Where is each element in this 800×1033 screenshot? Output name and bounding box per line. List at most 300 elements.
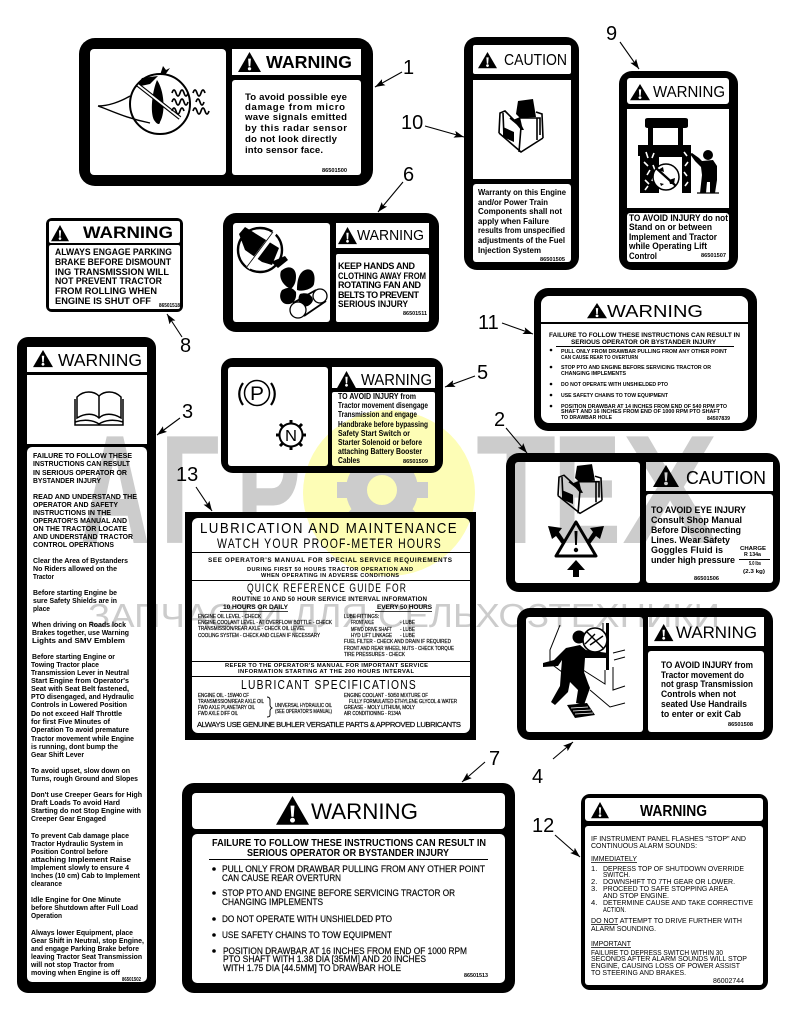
text block: fan: CLOTHING AWAY FROM xyxy=(338,271,426,281)
text block: 200 hour interval xyxy=(225,663,428,675)
text block: eye injury: Consult Shop Manual xyxy=(651,515,742,525)
column: 10 hours or daily xyxy=(198,604,332,639)
text block: operator instructions: INSTRUCTIONS CAN RESULT xyxy=(33,459,130,468)
text block: shutdown procedure: 4. xyxy=(591,898,597,907)
column: every 50 hours: MFWD DRIVE SHAFT xyxy=(351,627,393,633)
decal 12: alarm warning: 86002744 xyxy=(713,978,744,985)
text block: operator instructions: Gear Shift in Neutral, stop Engine, xyxy=(31,936,144,945)
heading: WARNING: WARNING xyxy=(640,803,707,820)
heading: CAUTION: CAUTION xyxy=(504,52,567,69)
callout 7 with arrow xyxy=(462,748,500,782)
decal 7: drawbar warning large xyxy=(182,783,515,993)
text block: instructions: CHANGING IMPLEMENTS xyxy=(222,897,323,908)
icon: hand and fan with belt xyxy=(238,227,327,318)
text block: operator instructions: Tractor xyxy=(33,572,54,581)
callout 2 with arrow xyxy=(494,409,527,453)
callout 5 with arrow: 5 xyxy=(477,362,488,384)
text block: warranty xyxy=(478,187,566,255)
text block: warranty: Injection System xyxy=(478,245,541,255)
text block: operator instructions: will not stop Tractor from xyxy=(30,960,114,969)
text block: operator instructions: READ AND UNDERSTAND THE xyxy=(33,492,137,501)
text block: handrails: seated Use Handrails xyxy=(661,699,747,709)
text block: operator instructions: Tractor movement while Engine xyxy=(31,734,134,743)
column: 10 hours or daily: 10 HOURS OR DAILY xyxy=(223,604,289,611)
text block: operator instructions: leaving Tractor Seat Transmission xyxy=(31,952,142,961)
watermark: АГРТЕХ letters and subtitle: Р xyxy=(236,403,301,576)
text block: shutdown procedure: ALARM SOUNDING. xyxy=(591,924,656,933)
callout 9 with arrow xyxy=(606,23,639,69)
text block: operator instructions: place xyxy=(33,604,50,613)
text block: warranty: adjustments of the Fuel xyxy=(478,235,565,245)
text block: operator instructions: moving when Engine is off xyxy=(31,968,120,977)
text block: operator instructions: Creeper Gear Engaged xyxy=(31,814,106,823)
warning triangle xyxy=(33,350,53,367)
callout 4 with arrow: 4 xyxy=(532,766,543,788)
heading: CAUTION: CAUTION xyxy=(686,468,766,488)
text block: tractor movement: attaching Battery Booster xyxy=(338,447,422,456)
text block: eye damage: into sensor face. xyxy=(245,145,323,156)
text block: tractor movement: TO AVOID INJURY from xyxy=(338,392,416,401)
text block: shutdown procedure: DO NOT ATTEMPT TO DRIVE FURTHER WITH xyxy=(591,916,742,925)
text block: instructions: USE SAFETY CHAINS TO TOW EQUIPMENT xyxy=(561,393,669,399)
text block: eye injury: Lines. Wear Safety xyxy=(651,535,730,545)
text block: operator instructions: Before starting Engine be xyxy=(33,588,117,597)
text block: warranty: Warranty on this Engine xyxy=(478,187,566,197)
text block: operator instructions: Seat with Seat Belt fastened, xyxy=(31,684,129,693)
text block: eye injury: Before Disconnecting xyxy=(651,525,741,535)
text block: instructions: DO NOT OPERATE WITH UNSHIELDED PTO xyxy=(222,914,392,925)
icon: open book xyxy=(75,392,123,425)
text block: instructions: CHANGING IMPLEMENTS xyxy=(561,371,627,377)
heading: WARNING: WARNING xyxy=(58,350,142,370)
text block: tractor movement: Transmission and engage xyxy=(338,410,418,419)
callout 5 with arrow xyxy=(445,362,488,387)
warning triangle xyxy=(587,303,607,318)
text block: lubricant list right xyxy=(344,693,457,717)
column: 10 hours or daily: COOLING SYSTEM - CHECK AND CLEAN IF NECESSARY xyxy=(198,633,320,639)
text block: shutdown procedure: IMMEDIATELY xyxy=(591,854,637,863)
text block: eye injury: under high pressure xyxy=(651,555,735,565)
refrigerant charge note: (2.3 kg) xyxy=(743,569,765,575)
icon: neutral gear: N xyxy=(285,428,297,445)
decal 12: alarm warning xyxy=(581,794,768,990)
callout 2 with arrow: 2 xyxy=(494,409,505,431)
text block: instructions: SERIOUS OPERATOR OR BYSTANDER INJURY xyxy=(571,339,716,346)
text block: tractor movement: Cables xyxy=(338,456,361,465)
text block: lubricant list right: GREASE - MOLY LITHIUM, MOLY xyxy=(344,705,415,711)
text block: lubricant list right: AIR CONDITIONING - R134A xyxy=(344,711,401,717)
callout 4 with arrow xyxy=(532,742,573,788)
text block: instructions: CAN CAUSE REAR OVERTURN xyxy=(222,873,341,884)
text block: 200 hour interval: INFORMATION STARTING AT THE 200 HOURS INTERVAL xyxy=(238,669,414,675)
decal 1: radar warning xyxy=(79,38,373,186)
decal 3: long operator warning: 86501502 xyxy=(122,977,141,983)
text block: eye damage: by this radar sensor xyxy=(245,123,347,134)
text block: lubricant list left: TRANSMISSION/REAR AXLE OIL xyxy=(198,699,264,705)
warning triangle xyxy=(51,225,69,241)
decal 5: handbrake and neutral warning: 86501509 xyxy=(403,459,428,465)
warning triangle xyxy=(337,371,356,388)
watermark: АГРТЕХ letters and subtitle: Г xyxy=(160,403,220,576)
text block: operator instructions: Operation xyxy=(31,911,62,920)
column: every 50 hours: - LUBE xyxy=(400,620,415,626)
text block: operator instructions: Always lower Equipment, place xyxy=(31,928,133,937)
text block: eye damage: wave signals emitted xyxy=(244,112,347,123)
text block: eye injury: Goggles Fluid is xyxy=(651,545,723,555)
text block: handrails: not grasp Transmission xyxy=(661,679,753,689)
refrigerant charge note: R 134a xyxy=(744,552,762,558)
watermark: АГРТЕХ letters and subtitle: Е xyxy=(553,403,621,576)
text block: operator instructions: AND UNDERSTAND TRACTOR xyxy=(33,532,134,541)
text block: tractor movement: Safety Start Switch or xyxy=(338,429,410,438)
text block: instructions: CAN CAUSE REAR TO OVERTURN xyxy=(561,355,638,361)
text block: parking brake: ING TRANSMISSION WILL xyxy=(55,267,170,277)
warning triangle xyxy=(591,802,609,818)
text block: operator instructions: Lights and SMV Emblem xyxy=(32,636,125,645)
warning triangle xyxy=(276,796,309,825)
decal 8: parking brake warning xyxy=(46,218,183,312)
heading: WARNING: WARNING xyxy=(266,52,352,72)
text block: instructions: POSITION DRAWBAR AT 16 INCHES FROM END OF 1000 RPM xyxy=(223,946,467,957)
text block: handrails: Controls when not xyxy=(661,689,736,699)
watermark: АГРТЕХ letters and subtitle: Т xyxy=(476,403,556,576)
text block: operator instructions: ON THE TRACTOR LOCATE xyxy=(33,524,127,533)
text block: eye damage: damage from micro xyxy=(245,102,345,113)
callout 10 with arrow: 10 xyxy=(401,112,423,134)
text block: warranty: and/or Power Train xyxy=(478,197,548,207)
text block: instructions: STOP PTO AND ENGINE BEFORE SERVICING TRACTOR OR xyxy=(222,888,455,899)
refrigerant charge note: 5.0 lbs xyxy=(749,561,761,567)
column: every 50 hours: HYD LIFT LINKAGE xyxy=(351,633,392,639)
text block: instructions: SHAFT AND 16 INCHES FROM END OF 1000 RPM PTO SHAFT xyxy=(561,409,721,415)
text block: operator instructions: Do not exceed Half Throttle xyxy=(31,709,122,718)
decal 9: implement and tractor warning xyxy=(619,71,738,270)
decal 10: fuel injection caution: 86501505 xyxy=(540,257,565,263)
icon: engine block xyxy=(558,464,602,513)
text block: handrails: TO AVOID INJURY from xyxy=(661,660,753,670)
text block: instructions xyxy=(209,838,488,974)
text block: shutdown procedure: ENGINE, CAUSING LOSS OF POWER ASSIST xyxy=(591,961,740,970)
heading: quick reference guide: QUICK REFERENCE GUIDE FOR xyxy=(247,581,407,595)
text block: instructions: PTO SHAFT WITH 1.38 DIA [35MM] AND 20 INCHES xyxy=(223,954,426,965)
refrigerant charge note xyxy=(739,546,770,575)
text block: lift control xyxy=(628,213,728,261)
text block: instructions: PULL ONLY FROM DRAWBAR PULLING FROM ANY OTHER POINT xyxy=(561,349,728,355)
text block: operator instructions: PTO disengaged, and Hydraulic xyxy=(31,692,134,701)
text block: operator instructions: Transmission Lever in Neutral xyxy=(31,668,129,677)
decal 4: handrail warning: 86501508 xyxy=(728,722,753,728)
text block: operator instructions: sure Safety Shields are in xyxy=(33,596,117,605)
text block: operator instructions: Controls in Lowered Position xyxy=(31,700,127,709)
text block: lift control: Implement and Tractor xyxy=(629,232,718,242)
text block: instructions: FAILURE TO FOLLOW THESE INSTRUCTIONS CAN RESULT IN xyxy=(212,838,486,849)
text block: handrails xyxy=(661,660,753,719)
callout 13 with arrow: 13 xyxy=(176,464,198,486)
callout 11 with arrow: 11 xyxy=(478,312,499,334)
text block: instructions: FAILURE TO FOLLOW THESE INSTRUCTIONS CAN RESULT IN xyxy=(549,332,740,339)
decal 11: drawbar warning small xyxy=(534,288,757,431)
text block: warranty: apply when Failure xyxy=(478,216,549,226)
text block: operator instructions: clearance xyxy=(31,879,62,888)
text block: lubricant list left: FWD AXLE PLANETARY OIL xyxy=(198,705,255,711)
text block: operator instructions: OPERATOR'S MANUAL AND xyxy=(33,516,128,525)
heading: quick reference guide: ROUTINE 10 AND 50 HOUR SERVICE INTERVAL INFORMATION xyxy=(232,596,428,603)
text block: eye damage: do not look directly xyxy=(245,134,338,145)
heading: WARNING: WARNING xyxy=(357,227,424,244)
decal 2: air conditioning caution xyxy=(506,453,780,592)
watermark: АГРТЕХ letters and subtitle: ЗАПЧАСТИ ДЛЯ СЕЛЬХОЗТЕХНИКИ xyxy=(88,597,720,634)
callout 1 with arrow xyxy=(375,57,414,87)
text block: operator instructions: To prevent Cab damage place xyxy=(31,831,129,840)
text block: lubricant list left: FWD AXLE DIFF OIL xyxy=(198,711,238,717)
column: 10 hours or daily: ENGINE COOLANT LEVEL - AT OVERFLOW BOTTLE - CHECK xyxy=(198,620,332,626)
text block: operator instructions: FAILURE TO FOLLOW THESE xyxy=(33,451,132,460)
text block: service requirements xyxy=(208,557,453,579)
column: every 50 hours: EVERY 50 HOURS xyxy=(377,604,433,611)
text block: operator instructions: Implement slowly to ensure 4 xyxy=(31,863,130,872)
text block: operator instructions: BYSTANDER INJURY xyxy=(33,476,101,485)
text block: operator instructions: CONTROL OPERATIONS xyxy=(33,540,114,549)
text block: shutdown procedure: AND STOP ENGINE. xyxy=(603,891,669,900)
text block: lift control: Stand on or between xyxy=(629,222,712,232)
text block: operator instructions: Starting do not Stop Engine with xyxy=(31,806,141,815)
watermark: АГРТЕХ letters and subtitle: А xyxy=(80,403,150,576)
watermark: АГРТЕХ letters and subtitle: Х xyxy=(622,403,718,576)
icon: person between tractor tyres xyxy=(638,118,719,193)
text block: lubricant list left: UNIVERSAL HYDRAULIC OIL xyxy=(275,703,332,709)
text block: instructions: STOP PTO AND ENGINE BEFORE SERVICING TRACTOR OR xyxy=(561,365,711,371)
callout 11 with arrow xyxy=(478,312,533,334)
warning triangle xyxy=(478,52,497,68)
callout 3 with arrow: 3 xyxy=(182,401,193,423)
decal 5: handbrake and neutral warning xyxy=(221,358,443,473)
column: 10 hours or daily: ENGINE OIL LEVEL - CHECK xyxy=(198,614,261,620)
text block: shutdown procedure xyxy=(591,834,753,977)
text block: tractor movement: Handbrake before bypassing xyxy=(338,420,428,429)
text block: lubricant list left xyxy=(198,693,332,717)
icon: eye with microwave prohibition xyxy=(98,66,209,134)
text block: operator instructions: before Shutdown after Full Load xyxy=(31,903,138,912)
text block: shutdown procedure: TO STEERING AND BRAKES. xyxy=(591,968,686,977)
heading: WARNING: WARNING xyxy=(676,623,757,642)
text block: instructions: WITH 1.75 DIA [44.5MM] TO DRAWBAR HOLE xyxy=(223,963,401,974)
text block: instructions: PULL ONLY FROM DRAWBAR PULLING FROM ANY OTHER POINT xyxy=(222,864,485,875)
text block: lift control: TO AVOID INJURY do not xyxy=(629,213,728,223)
text block: shutdown procedure: 2. xyxy=(591,877,597,886)
heading: WARNING: WARNING xyxy=(607,301,703,321)
text block: lubricant list right: ENGINE COOLANT - 50/50 MIXTURE OF xyxy=(344,693,428,699)
text block: operator instructions: When driving on Roads lock xyxy=(32,620,127,629)
heading: WARNING: WARNING xyxy=(311,799,418,824)
column: every 50 hours: TIRE PRESSURES - CHECK xyxy=(344,652,405,658)
warning triangle xyxy=(653,465,679,487)
text block: instructions: DO NOT OPERATE WITH UNSHIELDED PTO xyxy=(561,382,668,388)
text block: parking brake: NOT PREVENT TRACTOR xyxy=(55,276,163,286)
text block: instructions xyxy=(549,332,740,421)
text block: handrails: to enter or exit Cab xyxy=(661,709,742,719)
callout 3 with arrow xyxy=(157,401,193,435)
text block: operator instructions: Turns, rough Ground and Slopes xyxy=(31,774,138,783)
text block: shutdown procedure: 3. xyxy=(591,884,597,893)
text block: instructions: TO DRAWBAR HOLE xyxy=(561,415,613,421)
text block: service requirements: WHEN OPERATING IN ADVERSE CONDITIONS xyxy=(261,573,399,579)
text block: fan xyxy=(338,261,426,309)
text block: instructions: USE SAFETY CHAINS TO TOW EQUIPMENT xyxy=(222,930,392,941)
column: every 50 hours: FUEL FILTER - CHECK AND DRAIN IF REQUIRED xyxy=(344,639,451,645)
callout 6 with arrow xyxy=(378,164,414,212)
heading: quick reference guide xyxy=(232,581,428,603)
text block: shutdown procedure: SECONDS AFTER ALARM SOUNDS WILL STOP xyxy=(591,954,747,963)
column: every 50 hours: FRONT AXLE xyxy=(351,620,374,626)
heading: lubrication and maintenance: LUBRICATION AND MAINTENANCE xyxy=(200,520,458,537)
callout 6 with arrow: 6 xyxy=(403,164,414,186)
text block: operator instructions: To avoid upset, slow down on xyxy=(31,766,130,775)
column: every 50 hours: LUBE FITTINGS: xyxy=(344,614,379,620)
text block: operator instructions: Operation To avoid premature xyxy=(31,725,129,734)
icon: person on cab step xyxy=(543,623,625,718)
icon: engine block xyxy=(499,99,543,152)
decal 9: implement and tractor warning: 86501507 xyxy=(701,253,726,259)
column: 10 hours or daily: TRANSMISSION/REAR AXLE - CHECK OIL LEVEL xyxy=(198,626,305,632)
decal 2: air conditioning caution: 86501506 xyxy=(694,576,719,582)
text block: shutdown procedure: DETERMINE CAUSE AND TAKE CORRECTIVE xyxy=(603,898,753,907)
text block: fan: SERIOUS INJURY xyxy=(338,299,408,309)
callout 8 with arrow: 8 xyxy=(180,335,191,357)
text block: operator instructions: Don't use Creeper Gears for High xyxy=(31,790,142,799)
text block: operator instructions: Draft Loads To avoid Hard xyxy=(31,798,120,807)
callout 1 with arrow: 1 xyxy=(403,57,414,79)
text block: parking brake: BRAKE BEFORE DISMOUNT xyxy=(55,257,172,267)
decal 8: parking brake warning: 86501518 xyxy=(159,303,180,309)
text block: operator instructions: Clear the Area of Bystanders xyxy=(33,556,128,565)
callout 13 with arrow xyxy=(176,464,212,511)
warning triangle xyxy=(654,624,673,641)
decal 13: lubrication and maintenance xyxy=(185,512,476,740)
text block: shutdown procedure: ACTION. xyxy=(603,905,626,914)
icon: neutral gear xyxy=(276,420,306,450)
text block: operator instructions: Position Control before xyxy=(31,847,108,856)
subheading: proof-meter hours: WATCH YOUR PROOF-METER HOURS xyxy=(217,535,442,551)
text block: shutdown procedure: 1. xyxy=(591,864,597,873)
text block: operator instructions: IN SERIOUS OPERATOR OR xyxy=(33,468,128,477)
text block: lubricant list left: ENGINE OIL - 15W40 CF xyxy=(198,693,249,699)
text block: operator instructions: Idle Engine for One Minute xyxy=(31,895,121,904)
text block: shutdown procedure: DOWNSHIFT TO 7TH GEAR OR LOWER. xyxy=(603,877,735,886)
column: every 50 hours: - LUBE xyxy=(400,633,415,639)
text block: parking brake: ENGINE IS SHUT OFF xyxy=(55,296,152,306)
heading: WARNING: WARNING xyxy=(653,84,725,101)
text block: warranty: results from unspecified xyxy=(478,225,565,235)
footer line: genuine parts: ALWAYS USE GENUINE BUHLER VERSATILE PARTS & APPROVED LUBRICANTS xyxy=(197,720,461,729)
text block: operator instructions xyxy=(30,451,144,977)
text block: operator instructions: is running, dont bump the xyxy=(31,742,118,751)
warning triangle xyxy=(338,227,357,244)
decal 4: handrail warning xyxy=(517,608,773,740)
decal 6: fan warning xyxy=(223,213,439,332)
text block: eye injury: TO AVOID EYE INJURY xyxy=(651,505,746,515)
decal 1: radar warning: 86501500 xyxy=(322,168,347,174)
text block: service requirements: SEE OPERATOR'S MANUAL FOR SPECIAL SERVICE REQUIREMENTS xyxy=(208,557,453,564)
heading: WARNING: WARNING xyxy=(83,223,173,242)
text block: operator instructions: No Riders allowed on the xyxy=(33,564,117,573)
column: every 50 hours xyxy=(344,604,454,658)
callout 12 with arrow xyxy=(532,815,580,857)
text block: tractor movement: Starter Solenoid or before xyxy=(338,438,423,447)
text block: operator instructions: Gear Shift Lever xyxy=(31,750,84,759)
text block: operator instructions: Tractor Hydraulic System in xyxy=(31,839,123,848)
text block: shutdown procedure: FAILURE TO DEPRESS SWITCH WITHIN 30 xyxy=(591,948,723,957)
warning triangle xyxy=(630,84,650,100)
text block: eye injury xyxy=(651,505,746,565)
callout 8 with arrow xyxy=(167,314,191,357)
text block: lubricant list right: FULLY FORMULATED ETHYLENE GLYCOL & WATER xyxy=(349,699,457,705)
text block: service requirements: DURING FIRST 50 HOURS TRACTOR OPERATION AND xyxy=(247,567,413,573)
icon: parking brake xyxy=(239,380,275,406)
text block: operator instructions: Inches (10 cm) Cab to Implement xyxy=(31,871,140,880)
column: every 50 hours: FRONT AND REAR WHEEL NUTS - CHECK TORQUE xyxy=(344,646,454,652)
text block: parking brake: ALWAYS ENGAGE PARKING xyxy=(55,247,172,257)
text block: handrails: Tractor movement do xyxy=(661,670,745,680)
text block: operator instructions: attaching Implement Raise xyxy=(31,855,131,864)
text block: eye damage xyxy=(244,92,347,156)
warning triangle xyxy=(238,52,261,72)
heading: lubricant specifications: LUBRICANT SPECIFICATIONS xyxy=(241,677,417,692)
text block: lift control: while Operating Lift xyxy=(628,241,707,251)
text block: operator instructions: Start Engine from Operator's xyxy=(31,676,129,685)
text block: 200 hour interval: REFER TO THE OPERATOR'S MANUAL FOR IMPORTANT SERVICE xyxy=(225,663,428,669)
text block: lubricant list left: (SEE OPERATOR'S MANUAL) xyxy=(275,709,332,715)
decal 7: drawbar warning large: 86501513 xyxy=(464,973,488,979)
callout 10 with arrow xyxy=(401,112,464,137)
text block: instructions: POSITION DRAWBAR AT 14 INCHES FROM END OF 540 RPM PTO xyxy=(561,404,727,410)
text block: eye damage: To avoid possible eye xyxy=(245,92,347,103)
text block: operator instructions: and engage Parking Brake before xyxy=(31,944,139,953)
refrigerant charge note: CHARGE xyxy=(740,546,766,552)
text block: operator instructions: Brakes together, use Warning xyxy=(32,628,129,637)
text block: operator instructions: Before starting Engine or xyxy=(32,652,115,661)
text block: parking brake: FROM ROLLING WHEN xyxy=(55,286,157,296)
text block: parking brake xyxy=(55,247,172,306)
text block: operator instructions: INSTRUCTIONS IN THE xyxy=(33,508,111,517)
text block: shutdown procedure: CONTINUOUS ALARM SOUNDS: xyxy=(591,841,697,850)
decal 11: drawbar warning small: 84507839 xyxy=(707,416,730,422)
text block: fan: ROTATING FAN AND xyxy=(338,280,422,290)
text block: operator instructions: OPERATOR AND SAFETY xyxy=(33,500,118,509)
text block: shutdown procedure: DEPRESS TOP OF SHUTDOWN OVERRIDE xyxy=(603,864,744,873)
text block: fan: BELTS TO PREVENT xyxy=(338,290,420,300)
text block: instructions: SERIOUS OPERATOR OR BYSTANDER INJURY xyxy=(247,848,449,859)
watermark: yellow circle of logo xyxy=(303,410,475,576)
callout 7 with arrow: 7 xyxy=(489,748,500,770)
text block: operator instructions: for first Five Minutes of xyxy=(31,717,110,726)
text block: lift control: Control xyxy=(629,251,657,261)
text block: shutdown procedure: PROCEED TO SAFE STOPPING AREA xyxy=(603,884,729,893)
watermark: gear of logo xyxy=(337,473,428,512)
text block: shutdown procedure: IF INSTRUMENT PANEL FLASHES "STOP" AND xyxy=(591,834,746,843)
text block: warranty: Components shall not xyxy=(478,206,562,216)
icon: pressure hazard triangle with arrows xyxy=(548,522,604,577)
watermark: АГРТЕХ letters and subtitle xyxy=(82,436,717,634)
heading: WARNING: WARNING xyxy=(361,372,432,389)
text block: operator instructions: Towing Tractor place xyxy=(31,660,99,669)
decal 10: fuel injection caution xyxy=(464,37,579,270)
icon: parking brake: P xyxy=(250,384,264,405)
text block: tractor movement: Tractor movement disengage xyxy=(338,401,429,410)
callout 9 with arrow: 9 xyxy=(606,23,617,45)
text block: shutdown procedure: IMPORTANT xyxy=(591,939,631,948)
text block: tractor movement xyxy=(338,392,429,465)
decal 6: fan warning: 86501511 xyxy=(403,311,427,317)
